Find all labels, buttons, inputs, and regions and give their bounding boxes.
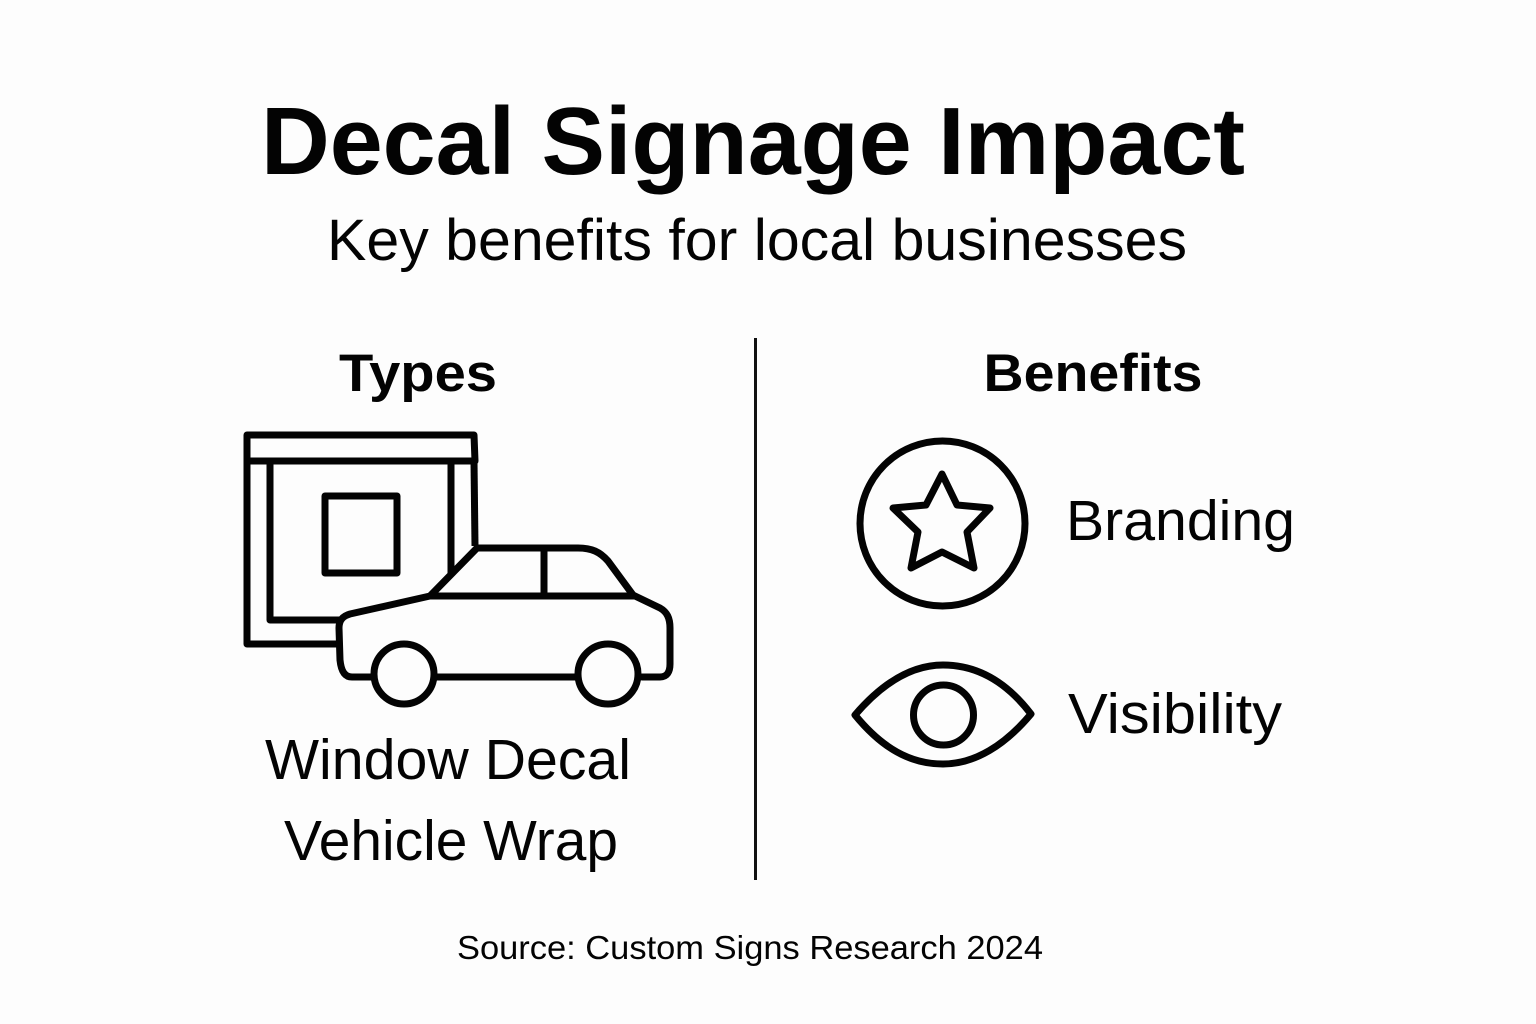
source note: Source: Custom Signs Research 2024 xyxy=(457,929,1043,966)
divider xyxy=(754,338,757,880)
label: vehicle wrap: Vehicle Wrap xyxy=(284,809,618,873)
label: branding: Branding xyxy=(1066,489,1295,553)
panel: benefits xyxy=(855,344,1295,764)
panel: types xyxy=(247,344,670,873)
heading: benefits: Benefits xyxy=(984,344,1202,403)
icon: storefront window xyxy=(247,435,475,644)
label: visibility: Visibility xyxy=(1068,682,1283,746)
icon: star badge xyxy=(860,441,1025,606)
heading: types: Types xyxy=(339,344,497,403)
label: window decal: Window Decal xyxy=(265,728,631,792)
icon: car xyxy=(339,548,670,704)
subtitle: Key benefits for local businesses xyxy=(327,208,1187,273)
icon: eye xyxy=(855,665,1031,764)
title: Decal Signage Impact xyxy=(261,88,1245,195)
